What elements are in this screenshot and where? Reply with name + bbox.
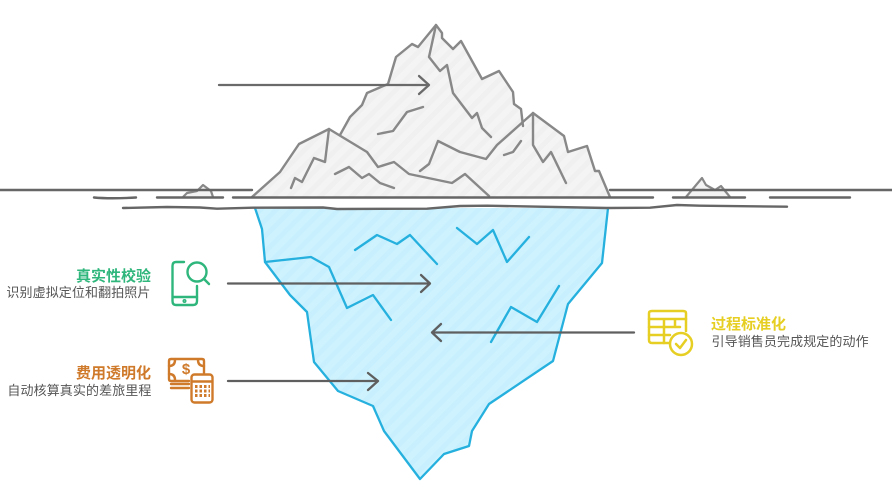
arrow: top <box>219 76 429 94</box>
label: process standardisation: 引导销售员完成规定的动作 <box>712 334 869 349</box>
underwater iceberg <box>255 208 608 479</box>
icon: table with check <box>649 311 692 355</box>
arrow: authenticity <box>228 275 430 292</box>
arrow: process <box>432 324 634 341</box>
label: expense transparency <box>7 364 152 398</box>
icon: money and calculator: $ <box>182 361 191 378</box>
small iceberg right <box>686 178 730 197</box>
label: expense transparency: 自动核算真实的差旅里程 <box>7 383 152 398</box>
label: process standardisation <box>711 315 869 349</box>
icon: phone with magnifier <box>172 262 209 305</box>
label: expense transparency: 费用透明化 <box>76 364 151 382</box>
icon: money and calculator <box>169 359 212 402</box>
water lines <box>0 190 892 209</box>
label: authenticity check <box>6 267 151 300</box>
label: process standardisation: 过程标准化 <box>711 315 786 333</box>
label: authenticity check: 真实性校验 <box>76 267 151 285</box>
arrow: expense <box>228 373 378 390</box>
small iceberg left <box>183 185 213 197</box>
iceberg above water <box>252 25 610 197</box>
label: authenticity check: 识别虚拟定位和翻拍照片 <box>6 285 150 300</box>
